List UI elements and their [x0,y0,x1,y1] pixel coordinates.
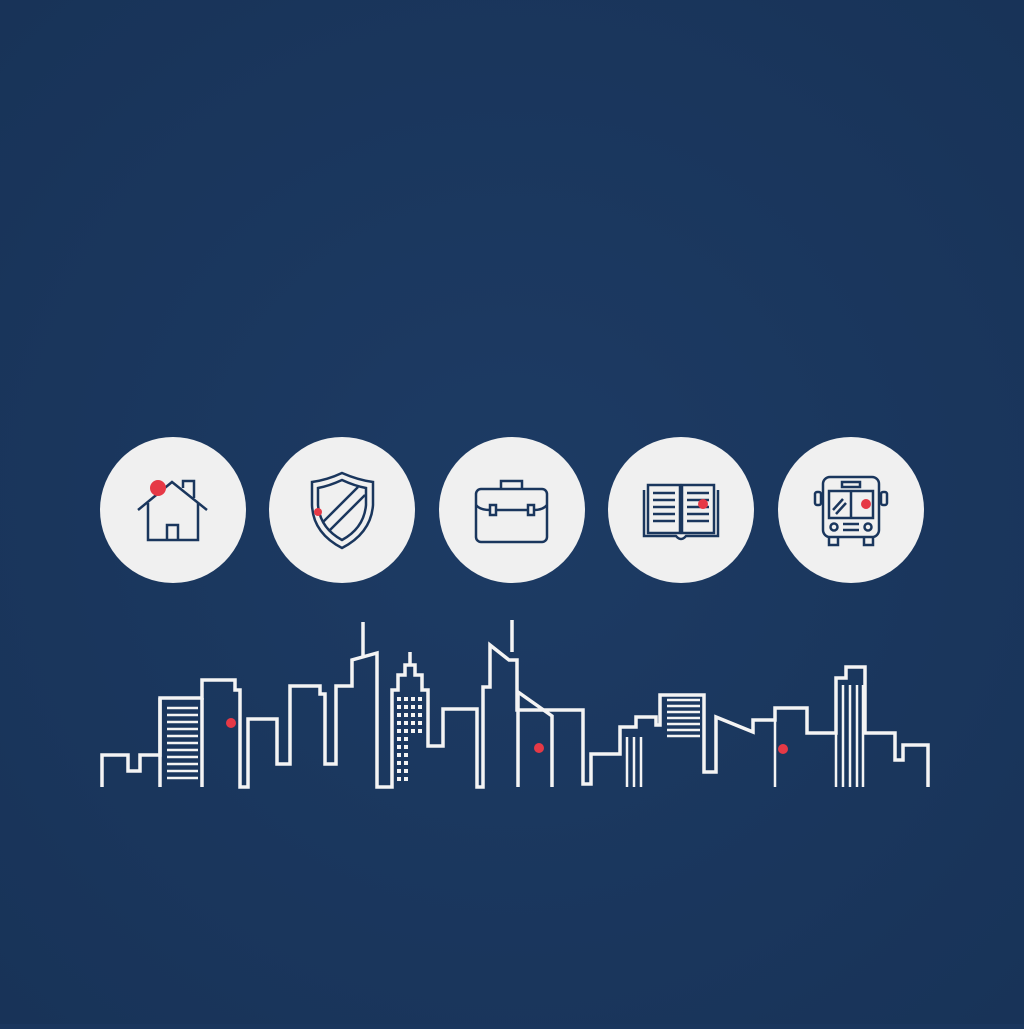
skyline windows [167,685,863,787]
tower window grid [397,697,422,781]
icon: shield [269,437,415,583]
icon: house [100,437,246,583]
icon: briefcase [439,437,585,583]
icon: book [608,437,754,583]
icon: bus [778,437,924,583]
red accent dots [226,718,788,754]
skyline [102,620,928,787]
